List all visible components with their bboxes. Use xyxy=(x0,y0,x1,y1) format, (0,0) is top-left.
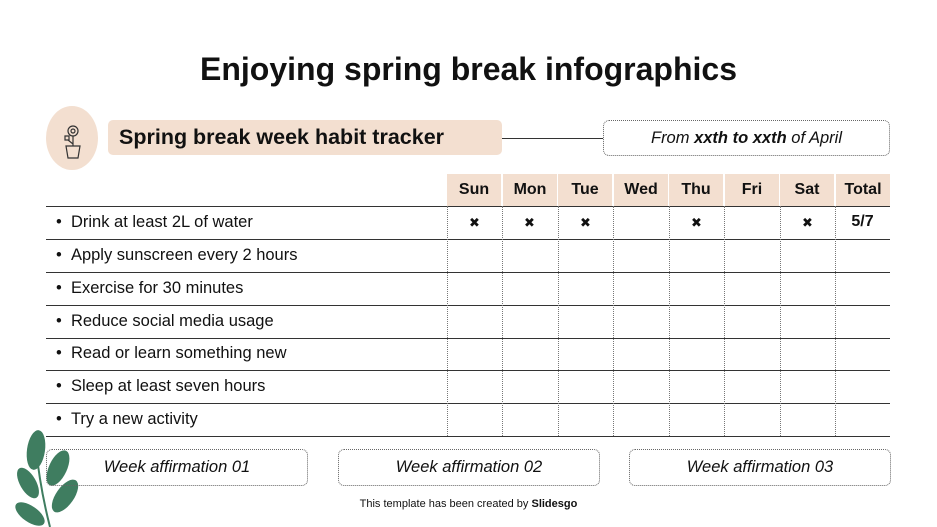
table: Fri xyxy=(742,181,762,198)
table: Sat xyxy=(795,181,819,198)
table: ✖ xyxy=(802,215,813,230)
title: Enjoying spring break infographics xyxy=(200,51,737,87)
table: ✖ xyxy=(691,215,702,230)
affirmation boxes: Week affirmation 01 xyxy=(104,458,250,476)
footer: This template has been created by Slidesgo xyxy=(360,498,577,510)
table: • Try a new activity xyxy=(56,410,198,428)
table: • Sleep at least seven hours xyxy=(56,377,265,395)
tracker heading xyxy=(108,120,502,155)
date box xyxy=(603,120,890,156)
table: • Apply sunscreen every 2 hours xyxy=(56,246,297,264)
connector arrow xyxy=(502,138,603,139)
leaf decoration xyxy=(15,430,78,527)
date box: xxth to xxth xyxy=(694,128,787,146)
table: Tue xyxy=(571,181,599,198)
table: ✖ xyxy=(580,215,591,230)
table: Thu xyxy=(681,181,711,198)
date box: From of April xyxy=(651,128,842,146)
table: • Exercise for 30 minutes xyxy=(56,279,243,297)
icon: flower pot xyxy=(46,106,98,170)
tracker heading: Spring break week habit tracker xyxy=(119,125,444,149)
table: ✖ xyxy=(469,215,480,230)
text: Week affirmation 02 xyxy=(396,458,542,476)
table: Sun xyxy=(459,181,489,198)
table: ✖ xyxy=(524,215,535,230)
table: 5/7 xyxy=(851,213,874,230)
table: Total xyxy=(844,181,882,198)
affirmation boxes xyxy=(46,449,308,486)
table: • Reduce social media usage xyxy=(56,312,274,330)
table: Mon xyxy=(514,181,546,198)
table: Wed xyxy=(624,181,658,198)
table: • Read or learn something new xyxy=(56,344,286,362)
text: Week affirmation 03 xyxy=(687,458,833,476)
table: • Drink at least 2L of water xyxy=(56,213,253,231)
